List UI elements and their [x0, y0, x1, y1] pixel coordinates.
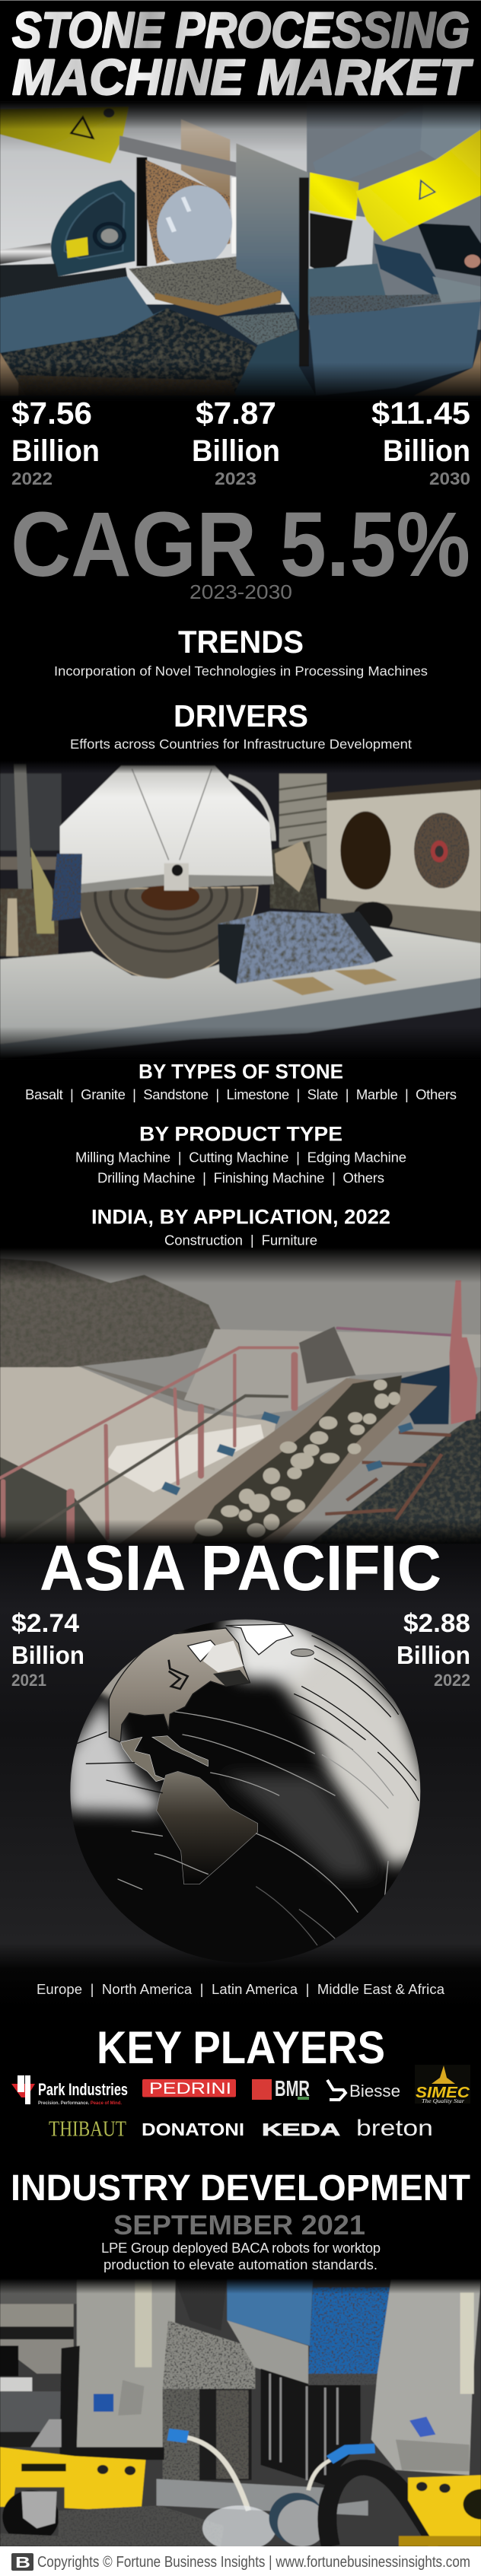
trends: Incorporation of Novel Technologies in Processing Machines [54, 663, 428, 679]
industry development: SEPTEMBER 2021 [113, 2209, 365, 2240]
by product type: Milling Machine | Cutting Machine | Edging Machine [75, 1149, 406, 1165]
stat 2023: $7.87 [196, 396, 276, 431]
asia pacific stat 2021 [11, 1609, 84, 1690]
market size stats [11, 396, 470, 488]
stat 2022: Billion [11, 434, 100, 468]
industry development: LPE Group deployed BACA robots for worktop [101, 2240, 381, 2256]
fortune business insights logo [11, 2553, 33, 2571]
stat 2030: Billion [383, 434, 470, 468]
industry development [11, 2168, 470, 2272]
asia pacific stat 2022: Billion [397, 1641, 470, 1669]
logos row 1 [11, 2065, 470, 2106]
logo: simec: SIMEC [416, 2085, 470, 2101]
trends: TRENDS [178, 624, 304, 660]
asia pacific stat 2021: Billion [11, 1641, 84, 1669]
logo: thibaut: THIBAUT [49, 2116, 126, 2141]
stat 2023: 2023 [215, 469, 256, 488]
logo: pedrini [142, 2079, 236, 2097]
fortune business insights logo: B [15, 2555, 30, 2571]
by product type: BY PRODUCT TYPE [139, 1123, 342, 1146]
india by application: INDIA, BY APPLICATION, 2022 [91, 1206, 390, 1229]
logo: bmr [252, 2077, 310, 2101]
title: MACHINE MARKET [12, 49, 473, 105]
continent: greenland [226, 1624, 293, 1655]
stat 2022: $7.56 [11, 396, 92, 431]
drivers [70, 698, 412, 752]
photo: stone conveyor [0, 1248, 481, 1546]
stat 2023 [192, 396, 280, 488]
trends [54, 624, 428, 679]
stat 2030: $11.45 [371, 396, 470, 431]
asia pacific stat 2021: $2.74 [11, 1609, 79, 1638]
by product type [75, 1123, 406, 1185]
asia pacific stat 2022: 2022 [434, 1671, 470, 1690]
continent: south america [157, 1771, 258, 1884]
by types of stone: Basalt | Granite | Sandstone | Limestone | Slate | Marble | Others [25, 1086, 457, 1102]
key players heading: KEY PLAYERS [97, 2022, 385, 2073]
industry development: production to elevate automation standards. [104, 2256, 377, 2272]
logo: keda: KEDA [262, 2120, 340, 2139]
globe [66, 1618, 428, 1963]
logos row 2 [49, 2116, 433, 2141]
by types of stone [25, 1061, 457, 1102]
photo: stone cutting saw [0, 761, 481, 1059]
by product type: Drilling Machine | Finishing Machine | Others [97, 1169, 384, 1185]
photo: band saw with coolant [0, 2279, 481, 2551]
india by application [91, 1206, 390, 1248]
by types of stone: BY TYPES OF STONE [139, 1061, 343, 1083]
footer bar [0, 2546, 481, 2576]
industry development: INDUSTRY DEVELOPMENT [11, 2168, 470, 2209]
logo: breton: breton [356, 2116, 433, 2141]
logo: biesse: Biesse [349, 2081, 400, 2101]
india by application: Construction | Furniture [164, 1232, 317, 1248]
asia pacific heading: ASIA PACIFIC [40, 1532, 441, 1604]
logo: pedrini: PEDRINI [149, 2080, 231, 2097]
continent: central america [120, 1737, 165, 1782]
logo: donatoni: DONATONI [142, 2120, 244, 2139]
stat 2023: Billion [192, 434, 280, 468]
photo: band saw cutting a round bar [0, 101, 481, 401]
continent: north america [109, 1628, 250, 1742]
asia pacific stat 2021: 2021 [11, 1671, 46, 1690]
stat 2022 [11, 396, 100, 488]
stat 2022: 2022 [11, 469, 53, 488]
logo: park industries: Park Industries [38, 2080, 128, 2099]
other regions: Europe | North America | Latin America | Middle East & Africa [37, 1981, 445, 1997]
logo: bmr: BMR [275, 2077, 310, 2101]
asia pacific stat 2022 [397, 1609, 470, 1690]
drivers: DRIVERS [174, 698, 308, 733]
logo: park industries [11, 2075, 128, 2106]
stat 2030: 2030 [429, 469, 470, 488]
drivers: Efforts across Countries for Infrastructure Development [70, 736, 412, 752]
logo: park industries: Precision. Performance. Peace of Mind. [38, 2101, 122, 2106]
asia pacific stat 2022: $2.88 [403, 1609, 470, 1638]
CAGR: 2023-2030 [190, 580, 292, 603]
logo: simec: The Quality Star [422, 2097, 464, 2104]
stat 2030 [371, 396, 470, 488]
title [12, 2, 473, 105]
logo: biesse [327, 2080, 400, 2101]
asia pacific background [0, 1544, 481, 2008]
logo: simec [415, 2065, 470, 2104]
